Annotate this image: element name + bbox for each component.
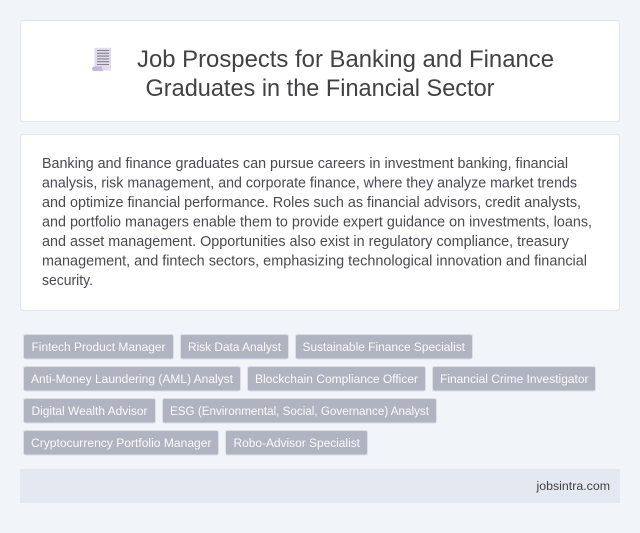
title [137,46,554,102]
tag: AML Analyst: Anti-Money Laundering (AML) Analyst [31,372,234,386]
title: Job Prospects for Banking and Finance [137,46,554,73]
tag: Cryptocurrency Portfolio Manager: Cryptocurrency Portfolio Manager [31,436,212,450]
footer bar [20,469,620,503]
description text: Banking and finance graduates can pursue careers in investment banking, financial [42,156,568,172]
tag list: job titles [24,334,596,455]
description text [42,156,592,289]
tag: Cryptocurrency Portfolio Manager [24,430,218,455]
tag: Risk Data Analyst: Risk Data Analyst [188,340,282,354]
tag: Sustainable Finance Specialist [296,334,472,359]
tag: Blockchain Compliance Officer: Blockchain Compliance Officer [255,372,418,386]
tag: Digital Wealth Advisor: Digital Wealth Advisor [32,404,148,418]
tag: Fintech Product Manager [24,334,174,359]
description text: security. [42,273,93,289]
description text: analysis, risk management, and corporate finance, where they analyze market trends [42,176,577,192]
tag: Robo-Advisor Specialist: Robo-Advisor Specialist [234,436,361,450]
tag: ESG Analyst [162,398,436,423]
tag: AML Analyst [24,366,240,391]
icon: paper receipt scroll [92,48,111,71]
tag: Sustainable Finance Specialist: Sustainable Finance Specialist [302,340,466,354]
tag: Robo-Advisor Specialist [226,430,368,455]
tag: Financial Crime Investigator [432,366,596,391]
tag: Risk Data Analyst [180,334,288,359]
description text: and asset management. Opportunities also exist in regulatory compliance, treasury [42,234,570,250]
description text: and optimize financial performance. Roles such as financial advisors, credit analysts, [42,195,581,211]
tag: Financial Crime Investigator: Financial Crime Investigator [440,372,588,386]
title: Graduates in the Financial Sector [146,75,494,102]
tag: Fintech Product Manager: Fintech Product Manager [32,340,166,354]
panel: description card [20,134,620,310]
description text: and portfolio managers enable them to provide expert guidance on investments, loans, [42,214,592,230]
tag: Blockchain Compliance Officer [248,366,426,391]
footer source text: jobsintra.com [535,479,610,493]
tag: Digital Wealth Advisor [24,398,156,423]
tag: ESG Analyst: ESG (Environmental, Social, Governance) Analyst [170,404,430,418]
description text: management, and fintech sectors, emphasizing technological innovation and financial [42,254,587,270]
panel: title card [20,20,620,122]
